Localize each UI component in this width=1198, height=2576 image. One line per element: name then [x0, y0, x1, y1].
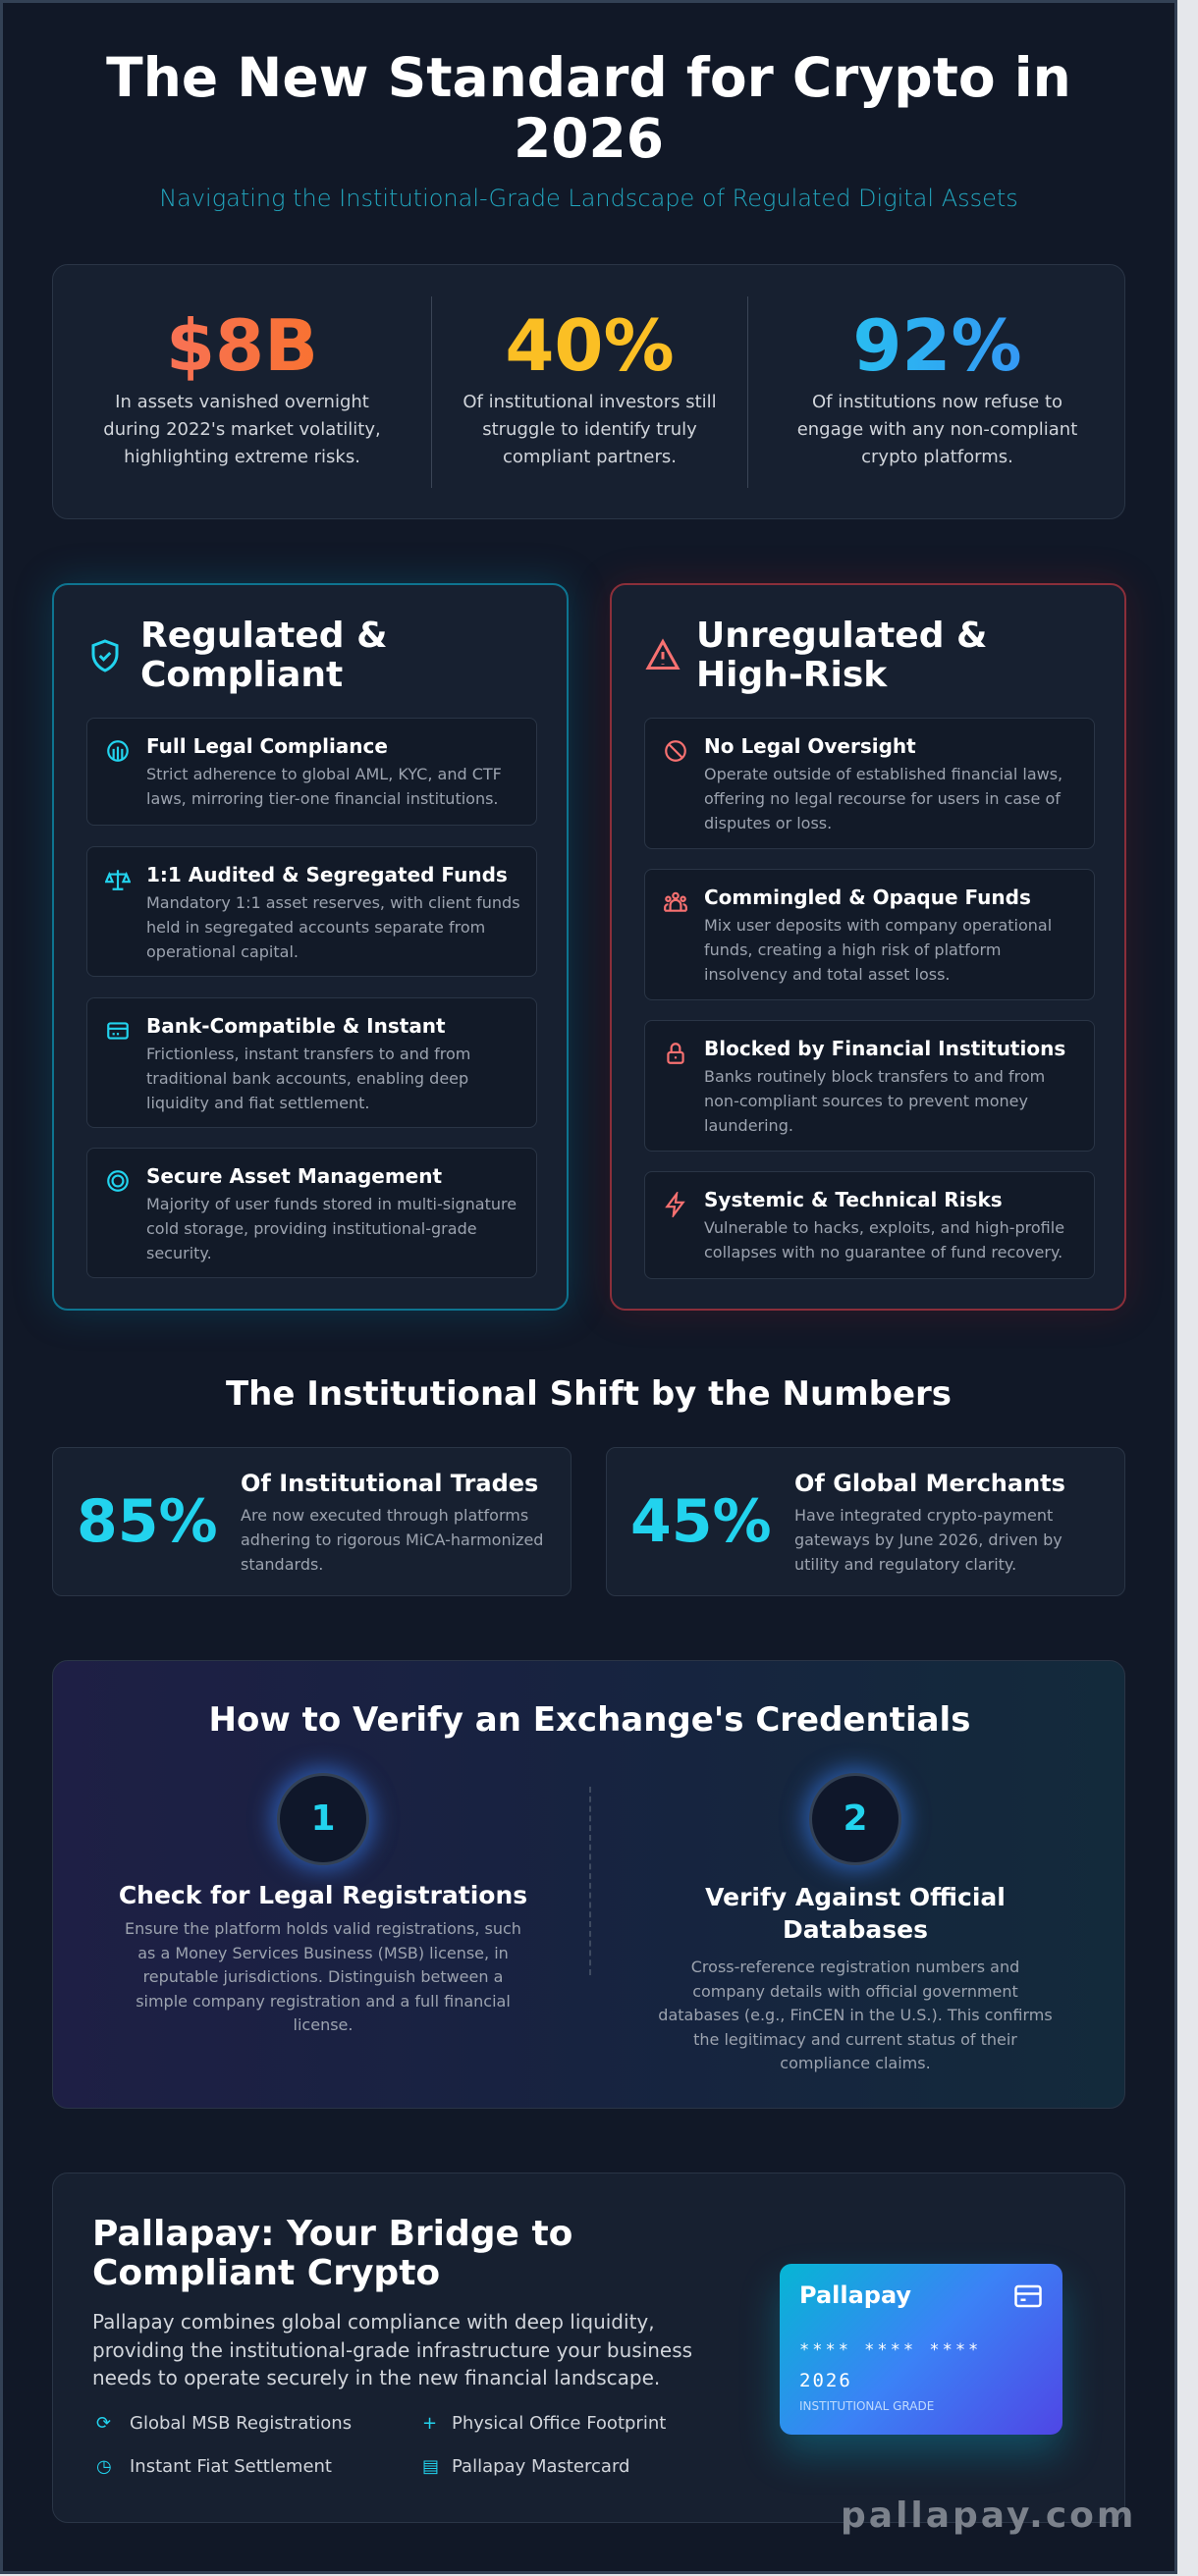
- stat card: 85%: 85%: [77, 1487, 218, 1556]
- step 2: Verify Against Official: [705, 1883, 1006, 1911]
- heading: [92, 2214, 572, 2293]
- stat: 40%: compliant partners.: [503, 447, 677, 467]
- features: Global MSB Registrations: [130, 2413, 352, 2434]
- item: No Legal Oversight: [704, 734, 916, 758]
- features: ◷: [96, 2456, 112, 2477]
- item: [644, 1020, 1095, 1152]
- heading: Regulated &: [140, 616, 387, 656]
- stat: $8B: during 2022's market volatility,: [103, 419, 381, 440]
- step 2: Cross-reference registration numbers and company details with official government databases (e.g., FinCEN in the U.S.). This confirms the legitimacy and current status of their compliance claims.: [658, 1958, 1053, 2072]
- features: Physical Office Footprint: [452, 2413, 666, 2434]
- heading: [140, 616, 387, 695]
- heading: Unregulated &: [696, 616, 987, 656]
- card graphic: 2026: [799, 2370, 852, 2391]
- stat card: 85%: Are now executed through platforms adhering to rigorous MiCA-harmonized standards.: [241, 1506, 543, 1574]
- stat card: 45%: Of Global Merchants: [794, 1470, 1065, 1497]
- card graphic: [780, 2264, 1062, 2435]
- item: Secure Asset Management: [146, 1164, 442, 1188]
- heading: High-Risk: [696, 655, 887, 695]
- item: Strict adherence to global AML, KYC, and CTF laws, mirroring tier-one financial institutions.: [146, 765, 502, 808]
- item: [86, 846, 537, 977]
- stat: 40%: Of institutional investors still: [463, 392, 717, 412]
- features: Pallapay Mastercard: [452, 2456, 629, 2477]
- stat card: 45%: 45%: [630, 1487, 772, 1556]
- features: [96, 2413, 666, 2477]
- item: 1:1 Audited & Segregated Funds: [146, 863, 508, 886]
- item: Systemic & Technical Risks: [704, 1188, 1003, 1211]
- item: [644, 1171, 1095, 1279]
- step 1: Check for Legal Registrations: [119, 1881, 527, 1909]
- heading: institutional shift: The Institutional Shift by the Numbers: [226, 1374, 952, 1414]
- step 2: 2: [843, 1798, 868, 1839]
- panel: verify credentials: [52, 1660, 1125, 2109]
- item: Commingled & Opaque Funds: [704, 886, 1031, 909]
- features: +: [422, 2413, 437, 2434]
- item: Mandatory 1:1 asset reserves, with client funds held in segregated accounts separate from operational capital.: [146, 893, 520, 961]
- stat card: 45%: Have integrated crypto-payment gateways by June 2026, driven by utility and regulatory clarity.: [794, 1506, 1062, 1574]
- icon: warning: [646, 638, 680, 670]
- stat card: 85%: [52, 1447, 572, 1596]
- stat: 92%: [797, 304, 1077, 467]
- heading: Compliant: [140, 655, 343, 695]
- item: [86, 1148, 537, 1278]
- item: Vulnerable to hacks, exploits, and high-profile collapses with no guarantee of fund recovery.: [704, 1218, 1064, 1261]
- panel: regulated: [52, 583, 569, 1311]
- item: Bank-Compatible & Instant: [146, 1014, 446, 1038]
- stat: 92%: Of institutions now refuse to: [812, 392, 1062, 412]
- panel: pallapay: [52, 2173, 1125, 2523]
- item: Operate outside of established financial laws, offering no legal recourse for users in case of disputes or loss.: [704, 765, 1062, 832]
- stat: 40%: struggle to identify truly: [482, 419, 697, 440]
- heading: [696, 616, 987, 695]
- item: Frictionless, instant transfers to and from traditional bank accounts, enabling deep liquidity and fiat settlement.: [146, 1045, 470, 1112]
- step 2: [658, 1753, 1053, 2072]
- features: ⟳: [96, 2413, 111, 2434]
- panel: key stats: [52, 264, 1125, 519]
- stat: $8B: highlighting extreme risks.: [124, 447, 360, 467]
- features: ▤: [422, 2456, 439, 2477]
- icon: shield: [92, 639, 118, 672]
- title: [106, 46, 1071, 170]
- card graphic: INSTITUTIONAL GRADE: [799, 2399, 934, 2413]
- item: Blocked by Financial Institutions: [704, 1037, 1065, 1060]
- item: [86, 718, 537, 826]
- stat: $8B: $8B: [166, 304, 318, 387]
- item: [644, 869, 1095, 1000]
- item: Banks routinely block transfers to and from non-compliant sources to prevent money laundering.: [704, 1067, 1045, 1135]
- stat: $8B: [103, 304, 381, 467]
- stat: 40%: 40%: [505, 304, 675, 387]
- step 1: 1: [310, 1798, 336, 1839]
- stat: $8B: In assets vanished overnight: [115, 392, 369, 412]
- item: Majority of user funds stored in multi-signature cold storage, providing institutional-grade security.: [146, 1195, 517, 1262]
- step 1: Ensure the platform holds valid registrations, such as a Money Services Business (MSB) license, in reputable jurisdictions. Distinguish between a simple company registration and a full financial license.: [125, 1919, 521, 2034]
- heading: How to Verify an Exchange's Credentials: [209, 1700, 970, 1740]
- item: Mix user deposits with company operational funds, creating a high risk of platform insolvency and total asset loss.: [704, 916, 1052, 984]
- subtitle: Navigating the Institutional-Grade Landscape of Regulated Digital Assets: [159, 185, 1018, 212]
- item: [644, 718, 1095, 849]
- watermark: pallapay.com: [841, 2496, 1136, 2536]
- features: Instant Fiat Settlement: [130, 2456, 332, 2477]
- stat card: 85%: Of Institutional Trades: [241, 1470, 538, 1497]
- title: 2026: [514, 107, 664, 170]
- stat: 92%: 92%: [852, 304, 1022, 387]
- heading: Pallapay: Your Bridge to: [92, 2214, 572, 2254]
- heading: Compliant Crypto: [92, 2253, 440, 2293]
- item: Full Legal Compliance: [146, 734, 388, 758]
- stat card: 45%: [606, 1447, 1125, 1596]
- title: The New Standard for Crypto in: [106, 46, 1071, 109]
- stat: 40%: [463, 304, 717, 467]
- step 2: Databases: [783, 1915, 928, 1944]
- item: [86, 997, 537, 1128]
- text: Pallapay combines global compliance with deep liquidity, providing the institutional-grade infrastructure your business needs to operate securely in the new financial landscape.: [92, 2310, 692, 2389]
- stat: 92%: crypto platforms.: [861, 447, 1013, 467]
- step 1: [119, 1754, 527, 2034]
- stat: 92%: engage with any non-compliant: [797, 419, 1077, 440]
- panel: unregulated: [610, 583, 1126, 1311]
- card graphic: **** **** ****: [799, 2340, 981, 2360]
- card graphic: Pallapay: [799, 2281, 911, 2309]
